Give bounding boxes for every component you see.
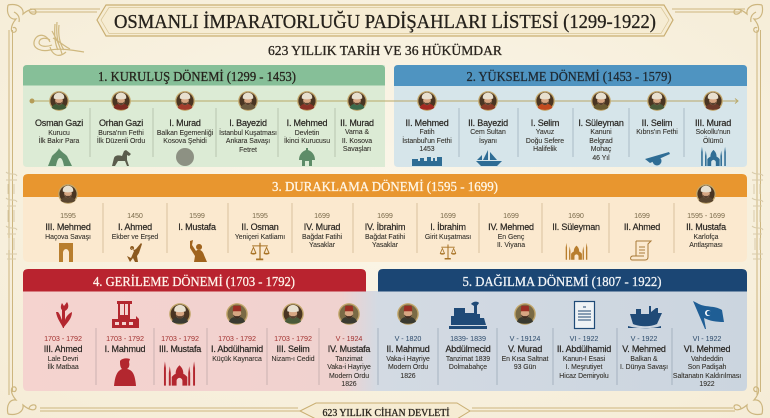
text: 1703 - 1792 bbox=[218, 334, 256, 343]
text: Saltanatın Kaldırılması bbox=[673, 373, 741, 380]
text: 1699 bbox=[634, 211, 650, 220]
text: IV. İbrahim bbox=[365, 222, 405, 232]
text: V - 1924 bbox=[336, 334, 362, 343]
text: II. Abdülhamid bbox=[557, 344, 611, 354]
ruler: I. Bayezid bbox=[219, 91, 277, 154]
text: I. Mustafa bbox=[178, 222, 216, 232]
text: Modern Ordu bbox=[329, 373, 369, 380]
panel 5 heading: 5. DAĞILMA DÖNEMİ (1807 - 1922) bbox=[462, 273, 662, 290]
icon: tughra bbox=[34, 22, 84, 55]
text: III. Murad bbox=[695, 118, 731, 128]
icon: printing press bbox=[112, 301, 139, 328]
text: 1453 bbox=[419, 146, 435, 153]
text: I. Mahmud bbox=[105, 344, 146, 354]
text: Savaşları bbox=[343, 146, 371, 153]
ruler: V. Murad bbox=[502, 303, 549, 371]
text: Vahdeddin bbox=[691, 356, 723, 363]
ruler: III. Mustafa bbox=[159, 303, 201, 386]
ruler: II. Süleyman bbox=[552, 211, 600, 260]
dividers panel 4 and 5 bbox=[96, 328, 672, 385]
text: II. Kosova bbox=[342, 138, 372, 145]
text: Ölümü bbox=[703, 137, 723, 145]
ruler: I. İbrahim bbox=[425, 211, 471, 260]
text: 1699 bbox=[503, 211, 519, 220]
text: Dolmabahçe bbox=[449, 364, 487, 371]
text: İlk Düzenli Ordu bbox=[97, 136, 145, 145]
text: 1699 bbox=[440, 211, 456, 220]
ruler: I. Murad bbox=[157, 91, 214, 166]
panel: Duraklama Dönemi bbox=[23, 174, 747, 262]
text: Vaka-i Hayriye bbox=[327, 364, 371, 371]
ruler: III. Ahmed bbox=[44, 302, 82, 371]
text: 1922 bbox=[699, 381, 715, 388]
text: 1595 - 1699 bbox=[687, 211, 725, 220]
text: Kanun-I Esasi bbox=[563, 356, 606, 363]
text: İstanbul Kuşatması bbox=[219, 128, 277, 137]
footer plaque bbox=[300, 403, 470, 418]
text: II. Selim bbox=[642, 118, 672, 128]
text: I. Süleyman bbox=[578, 118, 624, 128]
text: III. Selim bbox=[276, 344, 310, 354]
text: V. Murad bbox=[508, 344, 542, 354]
text: V - 1922 bbox=[631, 334, 657, 343]
panel: Yükselme Dönemi bbox=[394, 65, 747, 167]
ruler: IV. Mustafa bbox=[327, 303, 371, 388]
text: Bursa'nın Fethi bbox=[98, 130, 144, 137]
panel 2 heading: 2. YÜKSELME DÖNEMİ (1453 - 1579) bbox=[466, 69, 672, 84]
text: Mohaç bbox=[591, 146, 612, 153]
text: Vaka-i Hayriye bbox=[386, 356, 430, 363]
portrait bbox=[647, 91, 667, 111]
text: En Genç bbox=[498, 234, 525, 241]
side calligraphy right bbox=[752, 172, 763, 259]
panel 5 header bbox=[378, 269, 747, 292]
text: I. Dünya Savaşı bbox=[620, 364, 668, 371]
icon: steamship bbox=[628, 306, 662, 328]
ruler: V. Mehmed bbox=[620, 306, 668, 371]
portrait bbox=[111, 91, 131, 111]
text: 1699 bbox=[377, 211, 393, 220]
portrait bbox=[297, 91, 317, 111]
text: Yeniçeri Katliamı bbox=[235, 234, 285, 241]
text: 1703 - 1792 bbox=[274, 334, 312, 343]
text: 1703 - 1792 bbox=[44, 334, 82, 343]
text: I. Bayezid bbox=[229, 118, 267, 128]
portrait bbox=[478, 91, 498, 111]
ruler: Abdülmecid bbox=[445, 302, 491, 371]
text: Cem Sultan bbox=[470, 129, 506, 136]
text: VI - 1922 bbox=[570, 334, 598, 343]
portrait bbox=[535, 91, 555, 111]
icon: flag bbox=[693, 301, 724, 329]
text: I. Mehmed bbox=[287, 118, 328, 128]
panel 4 header bbox=[23, 269, 366, 292]
text: Kosova Şehidi bbox=[163, 138, 207, 145]
text: Küçük Kaynarca bbox=[212, 356, 262, 363]
text: İsyanı bbox=[479, 136, 497, 145]
text: 46 Yıl bbox=[592, 155, 610, 162]
ruler: II. Bayezid bbox=[468, 91, 508, 166]
ruler: II. Ahmed bbox=[624, 211, 660, 260]
text: Kurucu bbox=[48, 130, 70, 137]
text: Antlaşması bbox=[689, 242, 723, 249]
text: II. Bayezid bbox=[468, 118, 508, 128]
title: OSMANLI İMPARATORLUĞU PADİŞAHLARI LİSTESİ (1299-1922) bbox=[114, 10, 656, 33]
ruler: II. Mustafa bbox=[686, 184, 726, 249]
text: Kanuni bbox=[590, 129, 612, 136]
text: Lale Devri bbox=[48, 356, 79, 363]
ruler: II. Mahmud bbox=[386, 303, 430, 380]
text: İkinci Kurucusu bbox=[284, 136, 330, 145]
text: I. Meşrutiyet bbox=[566, 364, 603, 371]
ruler: VI. Mehmed bbox=[673, 301, 741, 388]
text: Varna & bbox=[345, 129, 369, 136]
portrait bbox=[514, 303, 536, 325]
panel 4 heading: 4. GERİLEME DÖNEMİ (1703 - 1792) bbox=[93, 273, 295, 290]
portrait bbox=[169, 303, 191, 325]
text: Belgrad bbox=[589, 138, 613, 145]
text: Ankara Savaşı bbox=[226, 138, 270, 145]
text: Balkan Egemenliği bbox=[157, 130, 214, 137]
text: Osman Gazi bbox=[35, 118, 83, 128]
text: I. Abdülhamid bbox=[211, 344, 263, 354]
text: II. Mustafa bbox=[686, 222, 726, 232]
text: Balkan & bbox=[630, 356, 658, 363]
text: I. Selim bbox=[531, 118, 559, 128]
text: Son Padişah bbox=[688, 364, 726, 371]
text: Orhan Gazi bbox=[99, 118, 143, 128]
text: 1839- 1839 bbox=[450, 334, 486, 343]
portrait bbox=[397, 303, 419, 325]
text: V - 1820 bbox=[395, 334, 421, 343]
portrait bbox=[175, 91, 195, 111]
ruler: Osman Gazi bbox=[35, 91, 83, 166]
text: V. Mehmed bbox=[622, 344, 666, 354]
text: İstanbul'un Fethi bbox=[402, 136, 452, 145]
icon: janissary bbox=[114, 358, 136, 386]
portrait bbox=[282, 303, 304, 325]
icon: scales bbox=[250, 243, 270, 260]
text: V - 19124 bbox=[510, 334, 540, 343]
icon: tent bbox=[48, 148, 72, 166]
text: Haçova Savaşı bbox=[45, 234, 91, 241]
icon: tulip bbox=[56, 302, 72, 328]
icon: scales bbox=[440, 244, 456, 260]
text: 1690 bbox=[568, 211, 584, 220]
panel body: lower band bbox=[23, 291, 747, 391]
text: 1703 - 1792 bbox=[161, 334, 199, 343]
text: 1826 bbox=[400, 373, 416, 380]
text: Fatih bbox=[419, 129, 435, 136]
portrait bbox=[238, 91, 258, 111]
ruler: II. Mehmed bbox=[402, 91, 452, 166]
ruler: IV. Murad bbox=[302, 211, 342, 249]
icon: helmet bbox=[299, 148, 315, 166]
panel 3 dividers bbox=[103, 203, 674, 253]
icon: mosque bbox=[566, 243, 587, 260]
text: VI - 1922 bbox=[693, 334, 721, 343]
ruler: III. Selim bbox=[271, 303, 315, 363]
text: II. Mehmed bbox=[405, 118, 449, 128]
text: II. Ahmed bbox=[624, 222, 660, 232]
title plate bbox=[97, 5, 673, 36]
panel: Kuruluş Dönemi bbox=[23, 65, 385, 167]
portrait bbox=[417, 91, 437, 111]
text: II. Osman bbox=[241, 222, 279, 232]
text: Yasaklar bbox=[372, 242, 399, 249]
text: IV. Murad bbox=[304, 222, 340, 232]
subtitle: 623 YILLIK TARİH VE 36 HÜKÜMDAR bbox=[268, 42, 503, 59]
text: II. Viyana bbox=[497, 242, 525, 249]
icon: ship bbox=[476, 150, 502, 166]
ruler: III. Murad bbox=[695, 91, 731, 166]
text: II. Mahmud bbox=[386, 344, 430, 354]
icon: document bbox=[574, 302, 594, 328]
text: 1703 - 1792 bbox=[106, 334, 144, 343]
icon: coin bbox=[176, 148, 194, 166]
timeline upper bbox=[30, 98, 738, 104]
text: 1599 bbox=[189, 211, 205, 220]
ruler: I. Süleyman bbox=[578, 91, 624, 162]
text: 1595 bbox=[60, 211, 76, 220]
ruler: II. Murad bbox=[340, 91, 374, 153]
text: Abdülmecid bbox=[445, 344, 491, 354]
text: Nizam-ı Cedid bbox=[271, 356, 315, 363]
ruler: II. Abdülhamid bbox=[557, 302, 611, 380]
text: Sokollu'nun bbox=[696, 129, 731, 136]
text: 1699 bbox=[314, 211, 330, 220]
text: İlk Bakır Para bbox=[39, 136, 80, 145]
ruler: IV. Mehmed bbox=[488, 211, 534, 249]
panel 3 heading: 3. DURAKLAMA DÖNEMİ (1595 - 1699) bbox=[272, 178, 498, 195]
text: Hicaz Demiryolu bbox=[559, 373, 609, 380]
text: Bağdat Fatihi bbox=[302, 234, 342, 241]
icon: scroll bbox=[631, 241, 651, 260]
text: Bağdat Fatihi bbox=[365, 234, 405, 241]
text: İlk Matbaa bbox=[47, 362, 79, 371]
portrait bbox=[347, 91, 367, 111]
panel 1 heading: 1. KURULUŞ DÖNEMİ (1299 - 1453) bbox=[98, 69, 296, 84]
text: 1450 bbox=[127, 211, 143, 220]
text: III. Mustafa bbox=[159, 344, 201, 354]
text: Kıbrıs'ın Fethi bbox=[636, 129, 678, 136]
text: VI. Mehmed bbox=[684, 344, 730, 354]
portrait bbox=[58, 184, 78, 204]
panel 2 header bbox=[394, 65, 747, 86]
text: Yavuz bbox=[536, 129, 555, 136]
icon: cannon bbox=[645, 152, 670, 166]
text: Girit Kuşatması bbox=[425, 234, 471, 241]
ruler: I. Abdülhamid bbox=[211, 303, 263, 363]
text: 93 Gün bbox=[514, 364, 536, 371]
text: Tanzimat bbox=[335, 356, 363, 363]
text: III. Mehmed bbox=[45, 222, 91, 232]
ruler: III. Mehmed bbox=[45, 184, 91, 262]
text: Tanzimat 1839 bbox=[446, 356, 490, 363]
side calligraphy left bbox=[6, 172, 17, 259]
portrait bbox=[226, 303, 248, 325]
ruler: I. Mahmud bbox=[105, 301, 146, 386]
text: Doğu Sefere bbox=[526, 138, 564, 145]
ruler: I. Mustafa bbox=[178, 211, 216, 262]
icon: mosque bbox=[701, 147, 726, 166]
text: Fetret bbox=[239, 147, 257, 154]
panel 3 header bbox=[23, 174, 747, 197]
text: I. Ahmed bbox=[118, 222, 152, 232]
portrait bbox=[49, 91, 69, 111]
text: 1826 bbox=[341, 381, 357, 388]
text: I. Murad bbox=[169, 118, 201, 128]
icon: arch bbox=[59, 243, 73, 262]
text: Ekber ve Erşed bbox=[112, 234, 158, 241]
ruler: I. Selim bbox=[526, 91, 564, 153]
text: 1595 bbox=[252, 211, 268, 220]
text: III. Ahmed bbox=[44, 344, 82, 354]
text: IV. Mehmed bbox=[488, 222, 534, 232]
timeline lower bbox=[180, 313, 408, 315]
icon: figure bbox=[190, 240, 207, 262]
icon: train bbox=[449, 302, 487, 329]
ruler: I. Mehmed bbox=[284, 91, 330, 166]
dividers panel 1 and 2 bbox=[90, 108, 684, 157]
panel 1 header bbox=[23, 65, 385, 86]
text: I. İbrahim bbox=[430, 222, 466, 232]
ruler: Orhan Gazi bbox=[97, 91, 145, 166]
icon: figure bbox=[127, 243, 142, 262]
icon: horse bbox=[112, 150, 131, 166]
icon: mosque bbox=[164, 361, 195, 386]
ruler: I. Ahmed bbox=[112, 211, 158, 262]
text: Yasaklar bbox=[309, 242, 336, 249]
icon: fortress bbox=[412, 157, 442, 166]
text: II. Süleyman bbox=[552, 222, 600, 232]
ruler: II. Osman bbox=[235, 211, 285, 260]
text: En Kısa Saltnat bbox=[502, 356, 549, 363]
portrait bbox=[338, 303, 360, 325]
portrait bbox=[703, 91, 723, 111]
text: Devletin bbox=[295, 130, 319, 137]
ruler: IV. İbrahim bbox=[365, 211, 405, 249]
portrait bbox=[696, 184, 716, 204]
text: Modern Ordu bbox=[388, 364, 428, 371]
text: Halifelik bbox=[533, 146, 557, 153]
text: Karlofça bbox=[694, 234, 719, 241]
text: IV. Mustafa bbox=[328, 344, 370, 354]
portrait bbox=[591, 91, 611, 111]
text: II. Murad bbox=[340, 118, 374, 128]
ruler: II. Selim bbox=[636, 91, 678, 166]
